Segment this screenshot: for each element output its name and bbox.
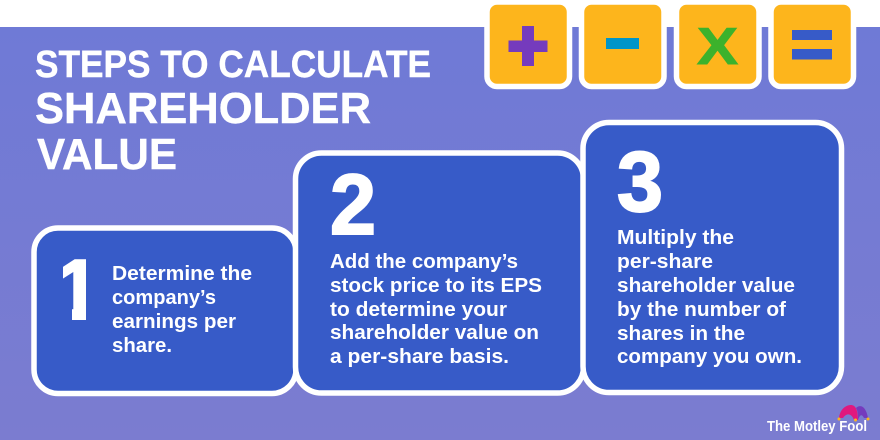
panel: step 2 (296, 153, 584, 393)
logo: The Motley Fool (767, 405, 870, 435)
step 3 text: per-share (617, 251, 713, 273)
step number 2: 2 (330, 158, 376, 253)
step 1 text: company’s (112, 287, 216, 309)
step 2 text: Add the company’s (330, 251, 518, 273)
step 2 text (330, 251, 542, 368)
step 2 text: shareholder value on (330, 322, 539, 344)
icon: multiply tile (676, 2, 759, 86)
step 3 text: shareholder value (617, 275, 795, 297)
icon: minus tile (582, 2, 664, 86)
step 1 text (112, 263, 252, 357)
step number 1: 1 (54, 243, 102, 338)
step 2 text: to determine your (330, 299, 507, 321)
panel: step 1 (34, 228, 296, 394)
icon: equals tile (771, 2, 854, 86)
step 1 text: Determine the (112, 263, 252, 285)
step 3 text: Multiply the (617, 227, 734, 249)
title: SHAREHOLDER (35, 84, 371, 133)
step 2 text: a per-share basis. (330, 346, 509, 368)
step 2 text: stock price to its EPS (330, 275, 542, 297)
step 3 text: company you own. (617, 346, 802, 368)
icon: multiply tile: X (697, 18, 738, 76)
icon: jester hat (838, 405, 870, 422)
step 1 text: share. (112, 335, 172, 357)
icon: plus tile (487, 2, 570, 86)
step 3 text (617, 227, 802, 368)
step number 3: 3 (617, 135, 663, 230)
step 3 text: shares in the (617, 323, 745, 345)
logo wordmark: The Motley Fool (767, 418, 867, 435)
title: VALUE (37, 130, 177, 179)
title (35, 44, 431, 179)
title: STEPS TO CALCULATE (35, 44, 431, 86)
step 3 text: by the number of (617, 299, 786, 321)
step 1 text: earnings per (112, 311, 236, 333)
panel: step 3 (583, 122, 842, 392)
